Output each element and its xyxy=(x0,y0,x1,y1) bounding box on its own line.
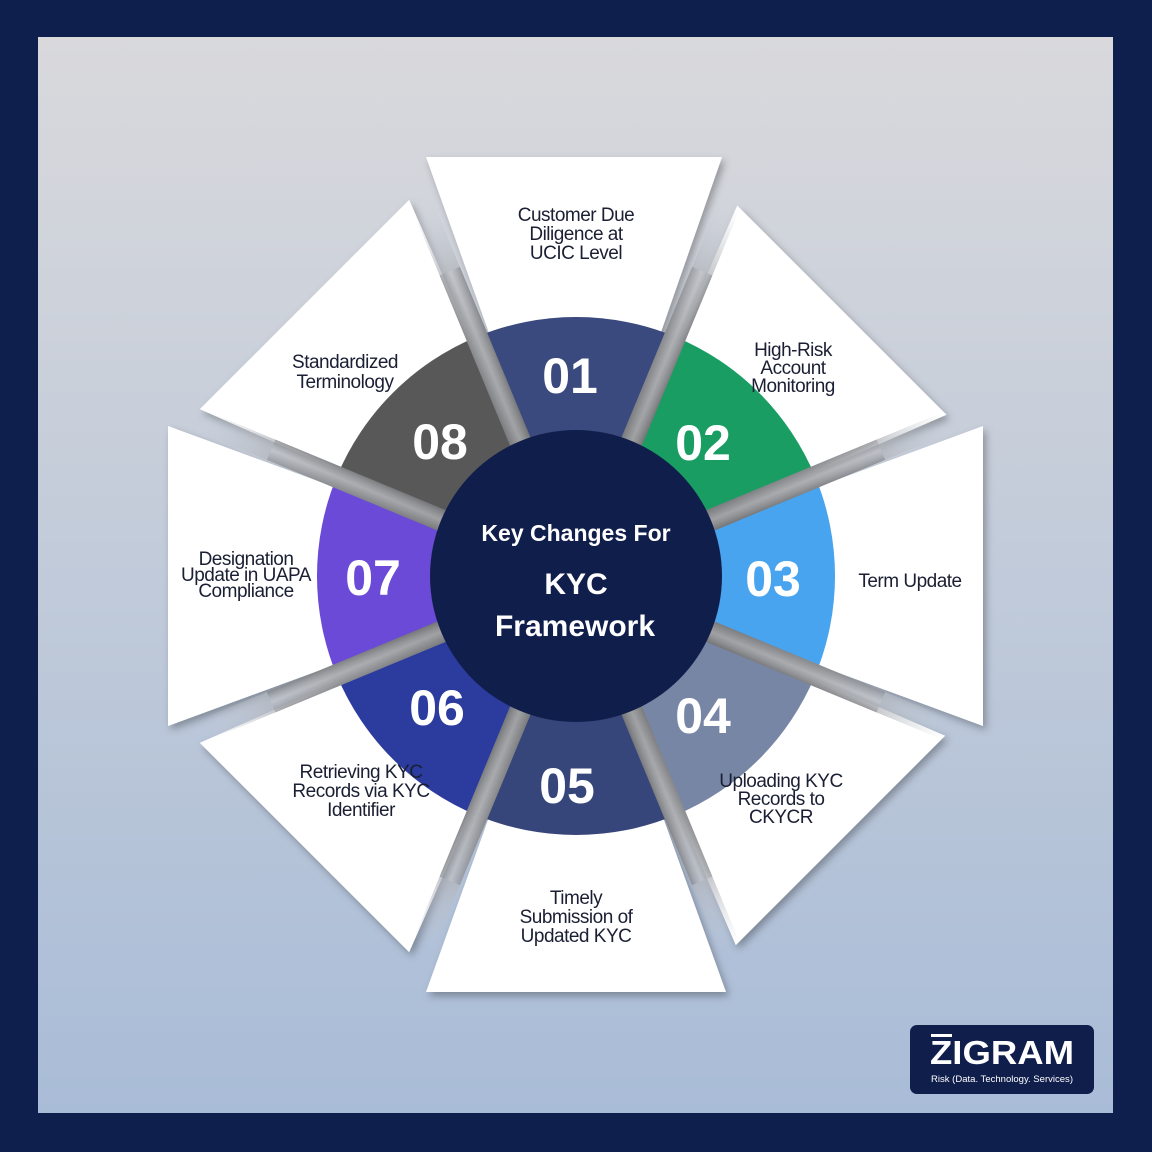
label 01: UCIC Level xyxy=(530,243,622,264)
logo xyxy=(910,1025,1094,1094)
label 02: Account xyxy=(760,358,827,379)
gray spokes xyxy=(202,202,950,950)
numbers: 07 xyxy=(345,550,401,606)
label 04: Records to xyxy=(738,789,824,810)
logo: ZIGRAM xyxy=(930,1034,1074,1071)
center title xyxy=(481,520,671,643)
center title: Key Changes For xyxy=(481,520,671,546)
label 07: Designation xyxy=(199,549,293,570)
label 04: CKYCR xyxy=(749,807,813,828)
numbers: 02 xyxy=(675,415,731,471)
label 05: Updated KYC xyxy=(521,926,631,947)
numbers: 06 xyxy=(409,680,465,736)
numbers: 01 xyxy=(542,348,598,404)
label 06: Identifier xyxy=(327,800,396,821)
label 03: Term Update xyxy=(858,571,962,592)
numbers: 08 xyxy=(412,414,468,470)
label 07: Compliance xyxy=(198,581,294,602)
center title: Framework xyxy=(495,610,655,643)
label 01: Diligence at xyxy=(529,224,624,245)
label 05: Timely xyxy=(550,888,602,909)
numbers: 04 xyxy=(675,688,731,744)
label 02: Monitoring xyxy=(751,376,835,397)
labels xyxy=(181,205,962,947)
label 01: Customer Due xyxy=(518,205,634,226)
label 02: High-Risk xyxy=(754,340,832,361)
center title: KYC xyxy=(544,568,608,601)
label 07: Update in UAPA xyxy=(181,565,312,586)
label 08: Terminology xyxy=(297,372,394,393)
label 06: Records via KYC xyxy=(292,781,430,802)
numbers: 05 xyxy=(539,758,595,814)
label 04: Uploading KYC xyxy=(719,771,843,792)
numbers xyxy=(345,348,801,814)
label 05: Submission of xyxy=(520,907,634,928)
center circle xyxy=(430,430,722,722)
numbers: 03 xyxy=(745,551,801,607)
logo: Risk (Data. Technology. Services) xyxy=(931,1074,1073,1085)
ring segments xyxy=(317,317,835,835)
label 08: Standardized xyxy=(292,352,398,373)
diagram xyxy=(168,157,983,992)
white wedges xyxy=(168,157,983,992)
label 06: Retrieving KYC xyxy=(300,762,422,783)
